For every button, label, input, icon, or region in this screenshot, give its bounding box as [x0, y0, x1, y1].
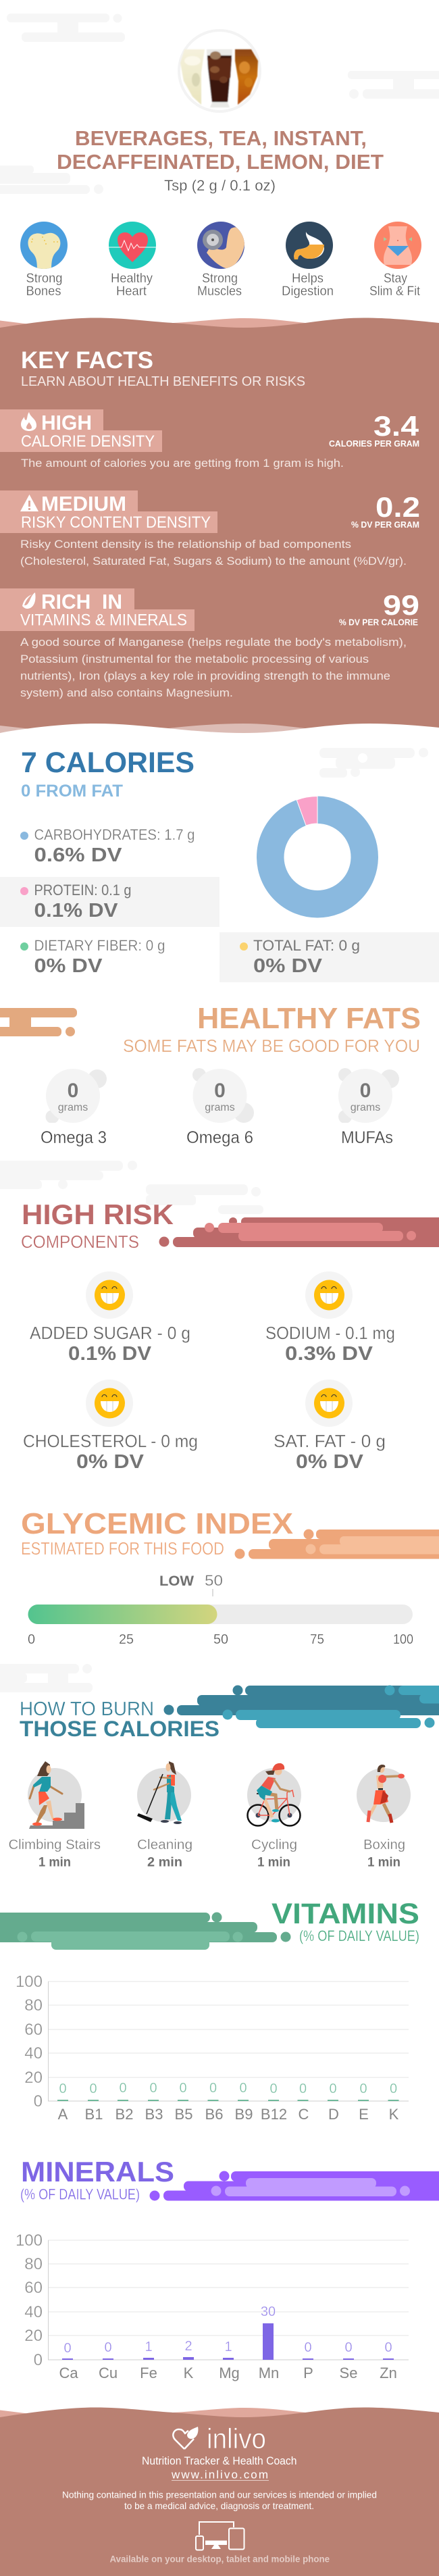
bar chart: vitamins: 0 [329, 2081, 337, 2096]
gauge: glycemic index scale: 50 [205, 1572, 223, 1589]
legend: total fat [220, 932, 439, 982]
bar chart: minerals: 1 [224, 2340, 232, 2354]
bar chart: minerals: 60 [24, 2279, 43, 2297]
gauge: glycemic index scale: LOW [159, 1573, 194, 1589]
fat: mufas: grams [351, 1102, 380, 1113]
activity: cycling: 1 min [257, 1855, 290, 1870]
fact: rich in vitamins and minerals: % DV PER CALORIE [339, 617, 418, 627]
heading: key facts: KEY FACTS [21, 347, 153, 374]
fact: high calorie density: 3.4 [373, 410, 419, 442]
bar chart: minerals: 0 [34, 2351, 43, 2369]
fact: high calorie density: CALORIE DENSITY [21, 432, 155, 451]
fat: omega 6: Omega 6 [186, 1128, 253, 1147]
disclaimer [62, 2489, 377, 2511]
heading: how to burn those calories: HOW TO BURN [20, 1698, 154, 1720]
legend: total fat: TOTAL FAT: 0 g [253, 937, 360, 954]
risk item: saturated fat: 0% DV [296, 1451, 364, 1473]
fact: rich in vitamins and minerals: system) and also contains Magnesium. [20, 686, 233, 699]
fact: high calorie density: The amount of calories you are getting from 1 gram is high. [21, 457, 344, 470]
benefit: stay slim and fit [369, 222, 421, 299]
decoration: vitamins bars [0, 1912, 290, 1950]
legend: protein: PROTEIN: 0.1 g [34, 882, 131, 899]
bar chart: minerals: Mn [259, 2365, 279, 2381]
bar chart: minerals: 100 [16, 2231, 43, 2250]
risk item: saturated fat [274, 1380, 386, 1473]
fact: medium risky content density: % DV PER GRAM [351, 520, 419, 530]
bar chart: minerals: 80 [24, 2255, 43, 2273]
legend: protein: 0.1% DV [34, 900, 118, 921]
heading: high risk: COMPONENTS [21, 1232, 139, 1252]
bar chart: vitamins: 0 [179, 2081, 187, 2096]
bar chart: minerals: 40 [24, 2303, 43, 2321]
bar chart: vitamins: E [359, 2106, 369, 2123]
bar chart: vitamins: 0 [359, 2081, 367, 2096]
activity: cycling [247, 1763, 301, 1870]
serving size: Tsp (2 g / 0.1 oz) [164, 177, 276, 194]
bar chart: vitamins: 0 [119, 2081, 127, 2096]
heading: calories [21, 747, 195, 801]
risk item: added sugar: 0.1% DV [68, 1343, 152, 1365]
fact: high calorie density: CALORIES PER GRAM [329, 438, 419, 449]
risk item: saturated fat: SAT. FAT - 0 g [274, 1431, 386, 1451]
fat: omega 6: grams [205, 1102, 235, 1113]
bar chart: vitamins: 40 [24, 2044, 43, 2063]
footer panel [0, 2408, 439, 2576]
decoration: healthy fats bars [0, 1008, 77, 1036]
bar chart: minerals: 2 [184, 2339, 192, 2354]
benefit: healthy heart: Heart [116, 284, 147, 299]
fact: rich in vitamins and minerals [0, 588, 419, 699]
logo: inlivo heart and leaf: inlivo [207, 2423, 266, 2454]
background cloud: header left [7, 14, 125, 42]
activity: cleaning [137, 1761, 192, 1870]
activity: boxing: Boxing [363, 1838, 405, 1852]
title: DECAFFEINATED, LEMON, DIET [57, 150, 384, 174]
fat: mufas [338, 1068, 399, 1147]
gauge: glycemic index scale [28, 1572, 413, 1647]
bar chart: vitamins: D [328, 2106, 339, 2123]
bar chart: minerals: 30 [261, 2304, 276, 2319]
bar chart: vitamins: K [389, 2106, 399, 2123]
bar chart: vitamins: 60 [24, 2021, 43, 2039]
benefit: healthy heart [109, 222, 156, 299]
title [57, 126, 384, 174]
bar chart: vitamins: 0 [89, 2081, 97, 2096]
bar chart: minerals [16, 2231, 409, 2381]
fat: mufas: 0 [360, 1080, 371, 1102]
benefit: helps digestion: Helps [292, 272, 324, 286]
bar chart: vitamins: 0 [59, 2081, 67, 2096]
bar chart: minerals: 0 [63, 2341, 72, 2356]
benefit: strong bones [20, 222, 68, 299]
bar chart: vitamins: 20 [24, 2069, 43, 2087]
activity: boxing [357, 1765, 411, 1870]
activity: cleaning: Cleaning [137, 1838, 192, 1852]
heading: high risk: HIGH RISK [22, 1198, 174, 1230]
fat: mufas: MUFAs [341, 1128, 393, 1147]
bar chart: vitamins: C [299, 2106, 309, 2123]
fact: rich in vitamins and minerals: VITAMINS & MINERALS [20, 611, 187, 630]
fact: medium risky content density: Risky Content density is the relationship of bad components [20, 538, 351, 551]
bar chart: minerals: Mg [219, 2365, 240, 2381]
bar chart: vitamins [16, 1973, 409, 2123]
background cloud: title left [0, 166, 103, 194]
bar chart: vitamins: 0 [239, 2081, 247, 2096]
fact: rich in vitamins and minerals: A good source of Manganese (helps regulate the body's metabolism), [20, 636, 407, 649]
decoration: glycemic bars [235, 1530, 439, 1559]
activity: climbing stairs: 1 min [38, 1855, 71, 1870]
bar chart: vitamins: A [58, 2106, 68, 2123]
bar chart: vitamins: B2 [115, 2106, 133, 2123]
heading: how to burn those calories [20, 1698, 220, 1741]
fact: rich in vitamins and minerals: 99 [383, 589, 419, 621]
bar chart: vitamins: B5 [175, 2106, 192, 2123]
heading: minerals [20, 2156, 174, 2202]
benefit: strong muscles: Strong [202, 272, 238, 286]
heading: key facts: LEARN ABOUT HEALTH BENEFITS OR RISKS [21, 374, 305, 389]
legend: carbohydrates: 0.6% DV [34, 844, 122, 866]
bar chart: vitamins: 0 [299, 2081, 307, 2096]
fact: high calorie density [0, 409, 419, 470]
risk item: added sugar: ADDED SUGAR - 0 g [30, 1323, 190, 1343]
fat: omega 6 [186, 1068, 254, 1147]
fact: medium risky content density: MEDIUM [41, 492, 126, 515]
heading: minerals: MINERALS [21, 2156, 174, 2188]
heading: healthy fats: HEALTHY FATS [197, 1002, 421, 1035]
legend: dietary fiber: DIETARY FIBER: 0 g [34, 937, 165, 954]
risk item: cholesterol: CHOLESTEROL - 0 mg [23, 1431, 198, 1451]
bar chart: minerals: 0 [304, 2340, 312, 2355]
legend: protein [0, 877, 220, 927]
background cloud: fats left [0, 1161, 137, 1189]
decoration: high risk bars [159, 1217, 439, 1247]
bar chart: minerals: 0 [104, 2340, 112, 2355]
benefit: strong bones: Bones [26, 284, 61, 299]
bar chart: vitamins: B12 [261, 2106, 287, 2123]
activity: climbing stairs [8, 1761, 101, 1870]
bar chart: minerals: Fe [140, 2365, 157, 2381]
bar chart: minerals: Zn [380, 2365, 397, 2381]
background cloud: burn [0, 1664, 93, 1692]
benefit: stay slim and fit: Stay [384, 272, 407, 286]
fat: omega 3: 0 [68, 1080, 78, 1102]
legend: carbohydrates [20, 826, 195, 866]
disclaimer: to be a medical advice, diagnosis or treatment. [124, 2500, 314, 2511]
fact: rich in vitamins and minerals: RICH IN [41, 590, 122, 613]
bar chart: minerals: Se [340, 2365, 357, 2381]
fact: rich in vitamins and minerals: Potassium (instrumental for the metabolic processing of various [20, 653, 369, 665]
bar chart: minerals: 0 [384, 2340, 392, 2355]
bar chart: vitamins: 0 [209, 2081, 217, 2096]
activity: cleaning: 2 min [147, 1855, 182, 1870]
disclaimer: Nothing contained in this presentation and our services is intended or implied [62, 2489, 377, 2500]
risk item: sodium [265, 1271, 395, 1365]
bar chart: minerals: K [184, 2365, 194, 2381]
bar chart: vitamins: 0 [149, 2081, 157, 2096]
background cloud: header right [348, 71, 439, 99]
heading: minerals: (% OF DAILY VALUE) [20, 2186, 140, 2202]
title: BEVERAGES, TEA, INSTANT, [75, 126, 367, 150]
bar chart: vitamins: B3 [145, 2106, 163, 2123]
risk item: sodium: 0.3% DV [285, 1343, 373, 1365]
benefit: strong muscles [197, 222, 245, 299]
heading: healthy fats: SOME FATS MAY BE GOOD FOR YOU [123, 1036, 420, 1056]
heading: glycemic index [21, 1507, 293, 1559]
background cloud: calories [319, 748, 428, 778]
heading: vitamins [272, 1898, 419, 1944]
fact: medium risky content density: 0.2 [376, 491, 420, 523]
benefit: helps digestion: Digestion [282, 284, 334, 299]
fact: medium risky content density: RISKY CONTENT DENSITY [21, 513, 211, 532]
gauge: glycemic index scale: 75 [310, 1632, 324, 1647]
benefit: healthy heart: Healthy [111, 272, 153, 286]
bar chart: vitamins: 0 [269, 2081, 278, 2096]
gauge: glycemic index scale: 25 [119, 1632, 134, 1647]
benefit: strong bones: Strong [26, 272, 62, 286]
food image: three glasses [179, 30, 260, 111]
legend: carbohydrates: CARBOHYDRATES: 1.7 g [34, 826, 195, 843]
fat: omega 6: 0 [214, 1080, 226, 1102]
heading: calories: 0 FROM FAT [21, 782, 123, 801]
availability note: Available on your desktop, tablet and mobile phone [109, 2554, 330, 2565]
background cloud: high risk [146, 1184, 263, 1214]
heading: calories: 7 CALORIES [21, 747, 195, 779]
logo: inlivo heart and leaf [173, 2423, 266, 2454]
fact: rich in vitamins and minerals: nutrients), Iron (plays a key role in providing strength to the immune [20, 670, 390, 682]
bar chart: minerals: 1 [145, 2340, 153, 2354]
activity: climbing stairs: Climbing Stairs [8, 1838, 101, 1852]
website link: www.inlivo.com [171, 2469, 268, 2481]
activity: cycling: Cycling [251, 1838, 297, 1852]
bar chart: vitamins: 100 [16, 1973, 43, 1991]
heading: glycemic index: ESTIMATED FOR THIS FOOD [21, 1538, 224, 1559]
bar chart: minerals: P [303, 2365, 313, 2381]
benefit: helps digestion [282, 222, 334, 299]
bar chart: minerals: 20 [24, 2327, 43, 2345]
benefit: stay slim and fit: Slim & Fit [369, 284, 421, 299]
activity: boxing: 1 min [367, 1855, 401, 1870]
fat: omega 3 [41, 1069, 107, 1147]
gauge: glycemic index scale: 50 [213, 1632, 228, 1647]
fact: medium risky content density: (Cholesterol, Saturated Fat, Sugars & Sodium) to the amount (%DV/gr). [20, 555, 407, 567]
bar chart: vitamins: B9 [235, 2106, 253, 2123]
decoration: minerals bars [150, 2171, 439, 2201]
gauge: glycemic index scale: 100 [393, 1632, 413, 1647]
bar chart: vitamins: 0 [34, 2092, 43, 2111]
heading: how to burn those calories: THOSE CALORIES [20, 1717, 220, 1741]
gauge: glycemic index scale: 0 [28, 1632, 35, 1647]
heading: healthy fats [123, 1002, 421, 1056]
bar chart: vitamins: 80 [24, 1996, 43, 2015]
risk item: added sugar [30, 1271, 190, 1365]
heading: key facts [21, 347, 305, 389]
bar chart: minerals: Cu [99, 2365, 118, 2381]
heading: vitamins: VITAMINS [272, 1898, 419, 1930]
decoration: burn bars [163, 1685, 439, 1728]
bar chart: vitamins: B1 [85, 2106, 103, 2123]
donut chart: calorie sources [270, 796, 365, 904]
bar chart: minerals: 0 [344, 2340, 353, 2355]
fact: medium risky content density [0, 490, 420, 567]
bar chart: minerals: Ca [59, 2365, 78, 2381]
legend: total fat: 0% DV [253, 955, 323, 977]
risk item: sodium: SODIUM - 0.1 mg [265, 1323, 395, 1343]
benefit: strong muscles: Muscles [197, 284, 242, 299]
heading: glycemic index: GLYCEMIC INDEX [21, 1507, 293, 1540]
tagline: Nutrition Tracker & Health Coach [142, 2454, 297, 2467]
legend: dietary fiber: 0% DV [34, 955, 103, 977]
heading: high risk [21, 1198, 174, 1252]
fact: high calorie density: HIGH [41, 411, 92, 434]
fat: omega 3: Omega 3 [41, 1128, 107, 1147]
fat: omega 3: grams [58, 1102, 88, 1113]
legend: dietary fiber [20, 937, 165, 977]
icon: devices [196, 2522, 244, 2550]
panel: key facts [0, 318, 439, 733]
bar chart: vitamins: 0 [390, 2081, 397, 2096]
bar chart: vitamins: B6 [205, 2106, 223, 2123]
risk item: cholesterol: 0% DV [76, 1451, 145, 1473]
risk item: cholesterol [23, 1380, 198, 1473]
